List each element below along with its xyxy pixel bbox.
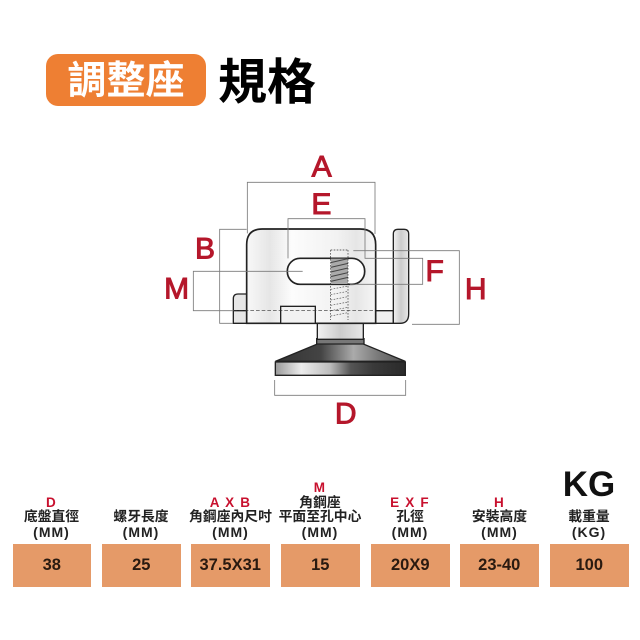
spec: inner size: 角鋼座內尺吋	[189, 509, 272, 524]
spec: thread length: (MM)	[123, 524, 159, 540]
dimension lines	[193, 182, 459, 395]
dimension letters: B	[195, 233, 215, 266]
threaded hole	[331, 250, 348, 320]
spec: thread length	[113, 509, 169, 540]
spec: base diameter	[24, 494, 79, 540]
spec: inner size: (MM)	[212, 524, 249, 540]
dimension letters	[164, 150, 487, 431]
bottom notch	[281, 306, 315, 323]
value: thread length	[102, 544, 180, 587]
dimension letters: M	[164, 273, 189, 306]
value: install height	[460, 544, 538, 587]
spec: base diameter: D	[46, 494, 57, 510]
dimension letters: A	[312, 150, 332, 183]
spec: load capacity: (KG)	[572, 524, 606, 540]
dimension letters: F	[426, 255, 444, 288]
spec: install height: H	[494, 494, 505, 510]
spec: plane to hole center: M	[314, 480, 326, 495]
title badge: 調整座	[67, 60, 184, 103]
right bracket	[375, 311, 393, 323]
spec: hole size: E X F	[390, 494, 430, 510]
spec: plane to hole center: (MM)	[302, 524, 338, 540]
diagram: leveling mount dimensions	[164, 150, 487, 431]
left tab	[233, 294, 247, 323]
dimension letters: E	[311, 188, 331, 221]
spec: inner size	[189, 494, 272, 540]
spec: install height: (MM)	[481, 524, 518, 540]
value: hole size	[371, 544, 450, 587]
spec: base diameter: 底盤直徑	[24, 509, 79, 524]
title heading: 規格	[218, 56, 316, 110]
dimension letters: H	[465, 273, 487, 306]
value: load capacity: 100	[575, 556, 603, 574]
value: plane to hole center: 15	[311, 556, 329, 574]
title badge	[46, 54, 206, 106]
value: install height: 23-40	[478, 556, 520, 574]
value: load capacity	[550, 544, 628, 587]
slot	[287, 258, 365, 284]
spec: inner size: A X B	[210, 494, 251, 510]
mount drawing	[233, 229, 409, 375]
value: inner size	[191, 544, 270, 587]
dimension letters: D	[335, 398, 357, 431]
spec: plane to hole center: 角鋼座	[299, 494, 341, 510]
KG label: KG	[563, 465, 615, 504]
value: hole size: 20X9	[391, 556, 430, 574]
spec: plane to hole center: 平面至孔中心	[279, 509, 361, 524]
value: base diameter: 38	[43, 556, 61, 574]
spec: load capacity	[568, 509, 610, 540]
spec: hole size	[390, 494, 430, 540]
foot pad base	[275, 323, 405, 375]
spec: thread length: 螺牙長度	[113, 509, 169, 524]
value: inner size: 37.5X31	[200, 556, 261, 574]
spec: hole size: 孔徑	[396, 509, 424, 524]
main body	[247, 229, 376, 323]
spec: install height	[472, 494, 527, 540]
spec: plane to hole center	[279, 480, 362, 540]
spec: load capacity: 載重量	[568, 509, 610, 524]
spec: hole size: (MM)	[392, 524, 428, 540]
value: plane to hole center	[281, 544, 360, 587]
value: thread length: 25	[132, 556, 150, 574]
spec: install height: 安裝高度	[472, 509, 527, 524]
spec: base diameter: (MM)	[33, 524, 70, 540]
dashed reference line	[233, 309, 375, 311]
value: base diameter	[12, 544, 91, 587]
